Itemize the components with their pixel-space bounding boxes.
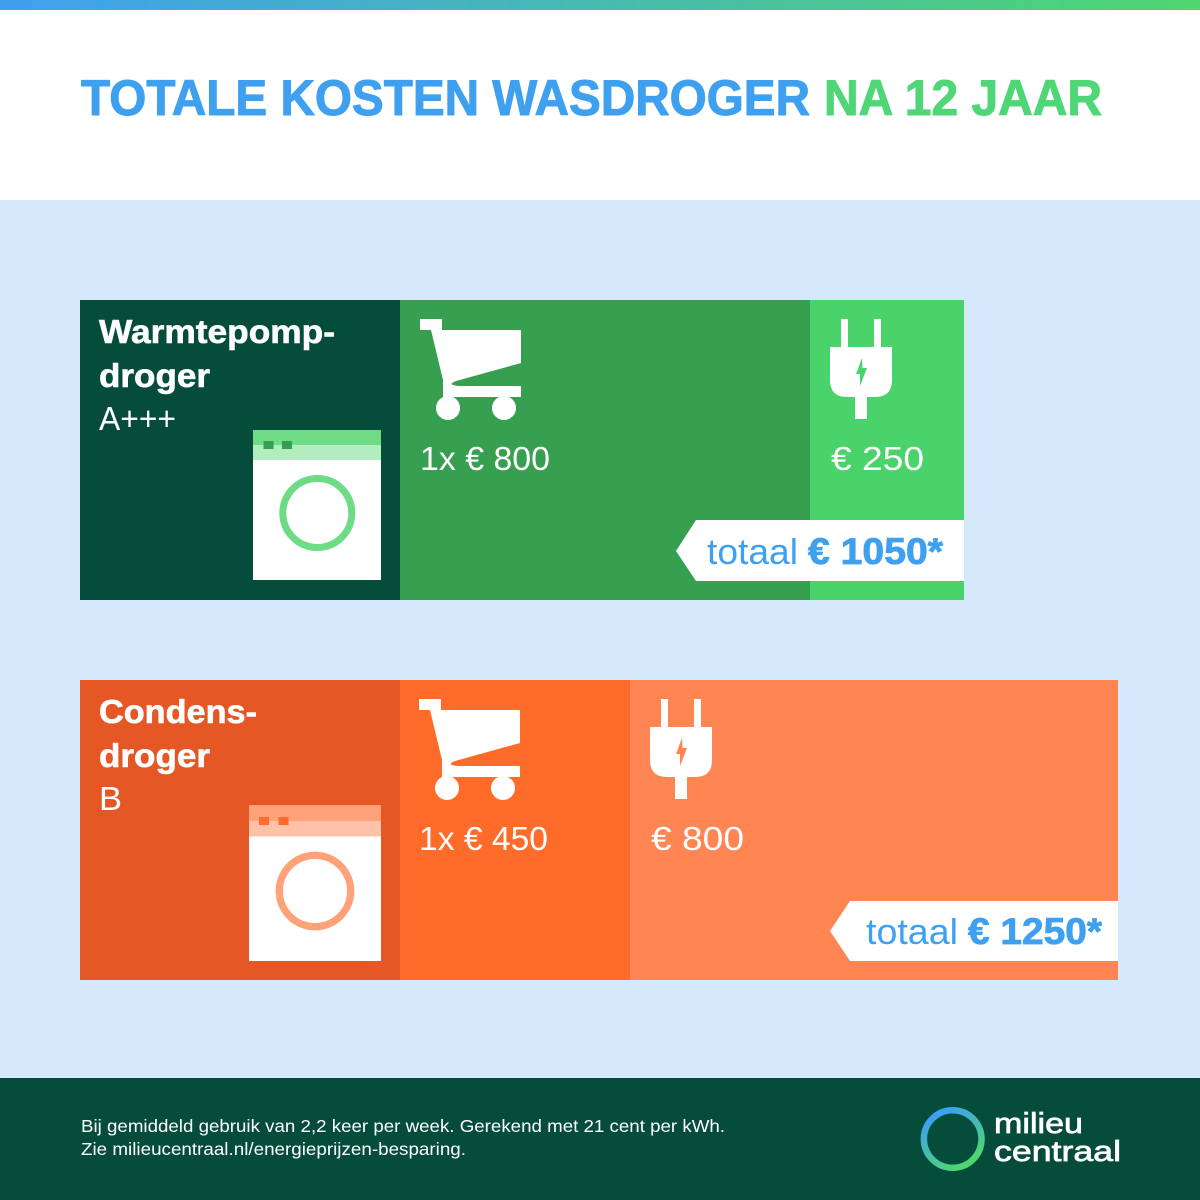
top gradient bar xyxy=(0,0,1200,10)
purchase cost block xyxy=(400,680,630,980)
total tag: totaal xyxy=(866,911,958,952)
title: TOTALE KOSTEN WASDROGER xyxy=(81,70,810,126)
label block: condensdroger B: droger xyxy=(99,737,210,774)
icon: plug xyxy=(830,319,892,419)
total tag: € 1250* xyxy=(968,911,1103,952)
logo: milieu centraal: centraal xyxy=(994,1136,1121,1168)
label block: warmtepompdroger A+++ xyxy=(80,300,400,600)
label block: condensdroger B xyxy=(80,680,400,980)
footer xyxy=(0,1078,1200,1200)
purchase cost block xyxy=(400,300,810,600)
icon: shopping cart xyxy=(419,699,520,800)
icon: shopping cart xyxy=(420,319,521,420)
icon: washing machine orange xyxy=(249,805,381,961)
light blue background panel xyxy=(0,200,1200,1078)
energy cost block xyxy=(810,300,964,600)
logo: milieu centraal xyxy=(924,1108,1121,1168)
panel: condensdroger xyxy=(80,680,1118,980)
label block: condensdroger B: B xyxy=(99,780,122,817)
label block: warmtepompdroger A+++: A+++ xyxy=(99,400,176,437)
icon: plug xyxy=(650,699,712,799)
purchase price: 1x € 800 xyxy=(420,440,550,477)
label block: condensdroger B: Condens- xyxy=(99,693,257,730)
footnote text: Bij gemiddeld gebruik van 2,2 keer per week. Gerekend met 21 cent per kWh. xyxy=(81,1116,725,1136)
icon: washing machine green xyxy=(253,430,381,580)
logo: milieu centraal: milieu xyxy=(994,1108,1083,1140)
energy price: € 250 xyxy=(831,440,924,477)
energy cost block xyxy=(630,680,1118,980)
label block: warmtepompdroger A+++: Warmtepomp- xyxy=(99,313,335,350)
label block: warmtepompdroger A+++: droger xyxy=(99,357,210,394)
total tag: totaal xyxy=(707,531,798,572)
energy price: € 800 xyxy=(651,820,744,857)
footnote text: Zie milieucentraal.nl/energieprijzen-besparing. xyxy=(81,1139,466,1159)
panel: warmtepompdroger xyxy=(80,300,964,600)
total tag xyxy=(676,520,964,581)
footnote text xyxy=(81,1116,725,1159)
total tag xyxy=(830,901,1118,961)
title: NA 12 JAAR xyxy=(824,70,1102,126)
purchase price: 1x € 450 xyxy=(419,820,548,857)
total tag: € 1050* xyxy=(808,531,944,572)
